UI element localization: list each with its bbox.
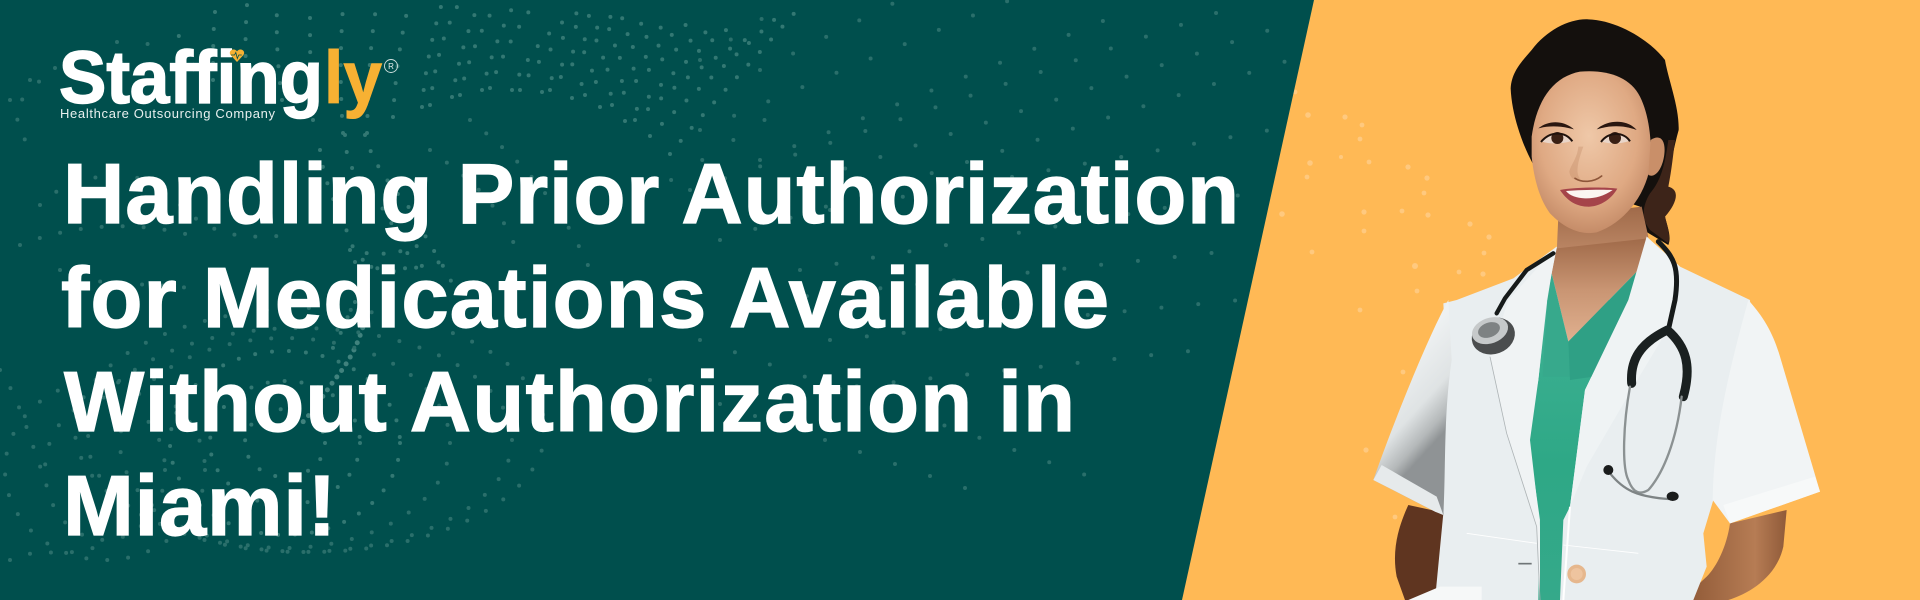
doctor illustration — [1373, 19, 1820, 600]
face — [1532, 71, 1651, 233]
right arm — [1682, 510, 1787, 600]
coat lines — [1467, 357, 1638, 600]
title: Miami! — [63, 459, 336, 554]
neck — [1553, 207, 1648, 343]
right lapel — [1570, 237, 1680, 507]
registered mark — [384, 60, 398, 72]
right ear — [1648, 137, 1665, 176]
coat left sleeve hem — [1373, 465, 1443, 515]
left arm — [1395, 505, 1447, 600]
eyebrows — [1538, 122, 1637, 130]
stethoscope chest piece — [1467, 312, 1520, 360]
title — [61, 147, 1239, 554]
title: Handling Prior Authorization — [63, 147, 1239, 242]
stethoscope ear tip right — [1667, 492, 1679, 501]
title: for Medications Available — [61, 251, 1109, 346]
central cluster — [343, 133, 418, 270]
stethoscope black headset — [1631, 330, 1687, 397]
braid shading — [1644, 140, 1676, 243]
left eye — [1541, 132, 1572, 144]
mouth — [1560, 188, 1617, 207]
hair back and braid — [1511, 19, 1679, 245]
logo: Staffingly — [59, 36, 398, 121]
logo tagline: Healthcare Outsourcing Company — [60, 106, 276, 121]
scrubs — [1530, 300, 1628, 600]
icon: heart with pulse — [230, 49, 244, 62]
teal panel dotted pattern — [0, 0, 1300, 560]
stethoscope steel tube — [1624, 387, 1682, 493]
stethoscope ear tip left — [1603, 465, 1613, 475]
stethoscope — [1497, 242, 1687, 501]
nose — [1569, 147, 1602, 181]
logo wordmark white: Staffing — [59, 36, 323, 119]
coat left sleeve — [1373, 300, 1452, 515]
scrubs collar left — [1543, 273, 1570, 377]
registered mark: R — [388, 62, 394, 71]
coat right sleeve hem — [1723, 477, 1820, 523]
coat button — [1567, 565, 1586, 583]
right eye — [1601, 132, 1630, 144]
stethoscope neck tube — [1497, 253, 1553, 313]
left lapel — [1490, 247, 1557, 600]
lower left pocket — [1408, 587, 1482, 600]
coat — [1435, 237, 1753, 600]
stethoscope ear tube — [1610, 473, 1668, 499]
fan scatter to right — [760, 0, 900, 70]
panel: teal background — [0, 0, 1314, 600]
stethoscope right tube — [1658, 242, 1677, 330]
scrubs neckline skin — [1552, 238, 1648, 342]
coat right sleeve — [1713, 300, 1820, 523]
title: Without Authorization in — [64, 355, 1075, 450]
logo wordmark orange: ly — [324, 36, 382, 119]
orange panel dots — [1279, 90, 1492, 519]
scrubs collar right — [1568, 270, 1638, 380]
